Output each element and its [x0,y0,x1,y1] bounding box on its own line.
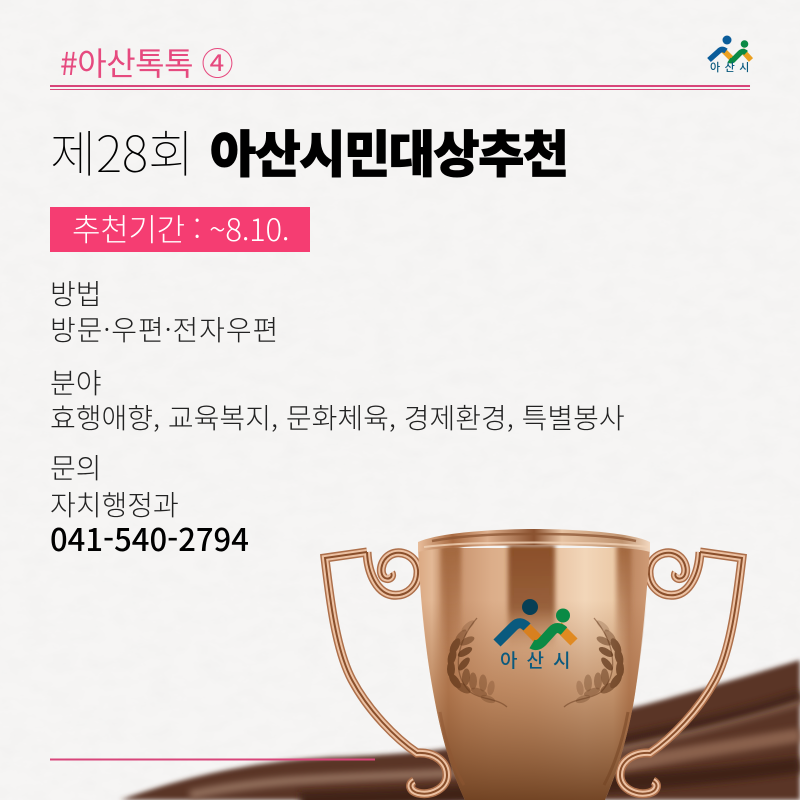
logo: Asan city [707,36,754,75]
lower pink rule [50,758,375,760]
logo: Asan city: 아산시 [710,59,754,75]
trophy illustration and chocolate swoosh [50,529,800,800]
laurel wreath left [446,618,507,707]
Asan city emblem on cup: 아산시 [500,646,579,673]
left handle [325,552,447,794]
header double rule [50,85,750,90]
Asan city emblem on cup [497,599,579,673]
contact label: 문의 [50,447,102,487]
period badge [50,207,310,252]
department: 자치행정과 [50,484,179,524]
trophy [325,529,742,800]
chocolate swoosh [120,660,800,800]
field text: 효행애향, 교육복지, 문화체육, 경제환경, 특별봉사 [50,397,625,437]
cup body [418,545,650,800]
method text: 방문·우편·전자우편 [50,309,279,349]
laurel wreath right [564,618,625,707]
method label: 방법 [50,273,102,313]
title: main: 아산시민대상추천 [210,115,568,187]
period text: 추천기간 : ~8.10. [72,205,289,250]
cup rim [418,529,650,552]
hashtag heading: #아산톡톡 ④ [60,39,233,85]
phone number: 041-540-2794 [50,515,249,560]
right handle [620,552,742,794]
title: edition: 제28회 [50,115,194,187]
field label: 분야 [50,362,102,402]
